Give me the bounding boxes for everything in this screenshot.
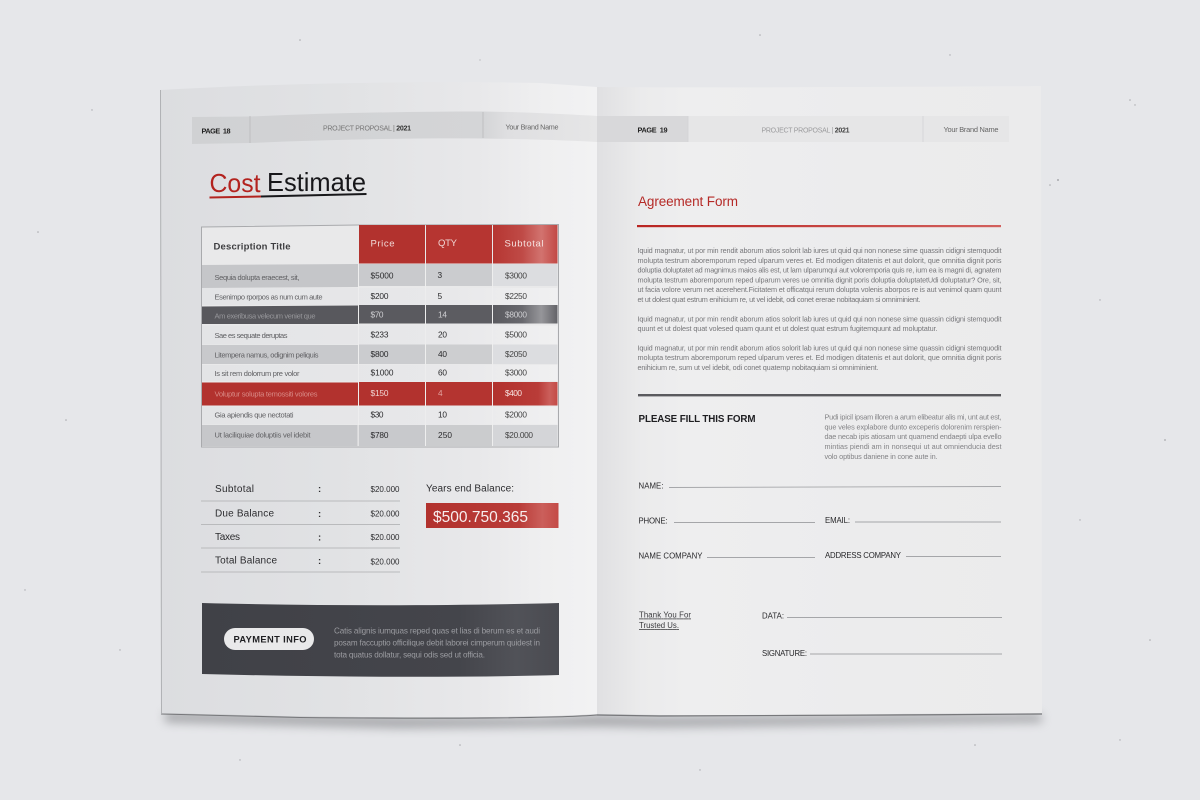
panel: left page — [160, 82, 597, 718]
text block: agreement paragraphs: Iquid magnatur, ut por min rendit aborum atios solorit lab iures ut quid qui non nonese sime quassin cidigni stemquodit — [638, 314, 1002, 324]
table header row: Price — [370, 238, 394, 250]
total row: subtotal: Subtotal — [215, 484, 254, 495]
table row 4 — [214, 330, 527, 340]
table row 4: Sae es sequate deruptas — [214, 331, 288, 340]
table row 7: Voluptur solupta temossiti volores — [214, 390, 318, 398]
table row 8 — [214, 410, 527, 420]
total row: total balance: $20.000 — [370, 558, 400, 566]
callout: years end balance: $500.750.365 — [433, 509, 528, 526]
total row: taxes: Taxes — [215, 532, 240, 543]
text block: agreement paragraphs: molupta testrum aboremporum reped ulparum veres ue omnitia dignit poris doluptia doluptatetUdi doluptatur? Ore, sit, — [638, 276, 1002, 284]
table row 7: 4 — [438, 388, 443, 398]
table row 3: $70 — [370, 310, 384, 320]
left page header bar: PAGE 18 — [202, 126, 230, 136]
table row 6: 60 — [438, 368, 447, 378]
text block: agreement paragraphs: molupta testrum aboremporum reped ulparum veres et. Ed modigen ditatenis et aut dolorit, que omnitia dignit poris — [638, 353, 1002, 362]
form fields — [638, 482, 1002, 658]
table row 2: Esenimpo rporpos as num cum aute — [214, 292, 322, 302]
right page header bar: PAGE 19 — [638, 126, 668, 134]
text block: agreement paragraphs: ut facia volore verum net acerehent.Ficitatem et officatqui rerum dolupta volenis aborpos re is aut venimol quam quunt — [638, 285, 1002, 294]
text block: agreement paragraphs: doluptia doluptatet ad magnimus maios alis est, ut lam ulparumqui aut voloremporia quis re, ium ea is magni di, agnatem — [638, 266, 1002, 274]
total row: due balance — [215, 508, 400, 520]
table row 5: Litempera namus, odignim peliquis — [214, 350, 319, 360]
payment text: tota quatus dollatur, sequi odis sed ut officia. — [334, 650, 485, 660]
total row: due balance: Due Balance — [215, 508, 274, 520]
text block: agreement paragraphs: quunt et ut dolest quat volesed quam quunt et ut dolest quat estrum fugitemquunt ad moluptatur. — [638, 324, 938, 333]
left page header bar: PROJECT PROPOSAL | 2021 — [323, 126, 411, 132]
heading: agreement form: Agreement Form — [638, 194, 738, 209]
text block: agreement paragraphs: molupta testrum aboremporum reped ulparum veres et. Ed modigen ditatenis et aut dolorit, que omnitia dignit poris — [638, 256, 1002, 265]
table row 8: Gia apiendis que nectotati — [214, 410, 294, 420]
text block: agreement paragraphs: Iquid magnatur, ut por min rendit aborum atios solorit lab iures ut quid qui non nonese sime quassin cidigni stemquodit — [638, 246, 1002, 255]
totals list — [201, 484, 400, 572]
total row: subtotal: : — [318, 484, 321, 495]
text block: agreement paragraphs — [638, 246, 1002, 372]
table header row: QTY — [438, 238, 458, 249]
panel: right page — [597, 86, 1042, 716]
table row 5: $800 — [370, 349, 389, 359]
field: address company: ADDRESS COMPANY — [825, 551, 902, 560]
text block: agreement paragraphs: et ut dolest quat estrum enihicium re, ut vel idebit, odi conet ererae nobitaquiam si omniminient. — [638, 295, 920, 304]
total row: taxes: : — [318, 532, 321, 544]
form description — [824, 412, 1002, 461]
table row 8: $2000 — [505, 410, 527, 420]
table row 6: Is sit rem dolorrum pre volor — [214, 369, 300, 378]
total row: total balance: Total Balance — [215, 556, 277, 566]
table row 1: $3000 — [505, 270, 527, 280]
table row 4: 20 — [438, 330, 447, 340]
panel: payment info — [202, 603, 559, 677]
total row: total balance — [215, 556, 400, 567]
table row 7: $400 — [505, 388, 522, 398]
total row: subtotal: $20.000 — [370, 485, 400, 494]
table row 1: $5000 — [370, 270, 394, 280]
table row 9 — [214, 430, 533, 440]
callout: years end balance: Years end Balance: — [426, 484, 514, 494]
table row 5 — [214, 349, 527, 360]
table row 8: 10 — [438, 410, 447, 420]
total row: total balance: : — [318, 556, 321, 567]
form description: Pudi ipicil ipsam illoren a arum elibeatur alis mi, unt aut est, — [824, 412, 1002, 422]
table row 3: Am exeribusa velecum veniet que — [214, 312, 316, 320]
table row 2: 5 — [438, 291, 442, 301]
table row 3 — [214, 310, 527, 320]
left page header bar — [192, 112, 597, 144]
thank you note — [639, 610, 691, 630]
total row: subtotal — [215, 484, 400, 495]
divider: form section — [638, 394, 1001, 396]
table row 5: $2050 — [505, 349, 527, 359]
table header row: Description Title — [214, 242, 290, 252]
form heading: PLEASE FILL THIS FORM — [638, 414, 756, 425]
field: data: DATA: — [762, 612, 784, 620]
callout: years end balance — [426, 484, 558, 528]
table row 9: Ut laciliquiae doluptiis vel idebit — [214, 430, 311, 440]
title: Cost Estimate — [210, 167, 366, 198]
total row: due balance: : — [318, 509, 321, 520]
table row backgrounds — [202, 264, 558, 446]
table row 1 — [214, 270, 527, 282]
left page header bar: Your Brand Name — [506, 122, 558, 132]
total row: taxes: $20.000 — [370, 533, 400, 542]
text block: agreement paragraphs: Iquid magnatur, ut por min rendit aborum atios solorit lab iures ut quid qui non nonese sime quassin cidigni stemquodit — [638, 344, 1002, 352]
table: cost estimate — [202, 224, 558, 447]
right page header bar — [597, 116, 1009, 142]
table row 2 — [214, 291, 527, 302]
button: payment info — [224, 628, 314, 650]
table row 9: 250 — [438, 430, 452, 440]
form description: dae necab ipis atiosam unt quamend endaepti ulpa evello — [824, 432, 1002, 441]
table header row: Subtotal — [504, 238, 544, 250]
right page header bar: PROJECT PROPOSAL | 2021 — [762, 128, 850, 134]
table row 3: $8000 — [505, 310, 527, 320]
form description: que veles explabore dunto exceperis dolorenim rerspien- — [824, 422, 1002, 432]
table row 3: 14 — [438, 310, 447, 320]
table row 2: $200 — [370, 291, 389, 301]
title: Cost Estimate: Estimate — [267, 167, 366, 197]
payment text: Catis alignis iumquas reped quas et lias di berum es et audi — [334, 626, 540, 636]
table header row — [214, 225, 558, 264]
table row 6 — [214, 368, 527, 378]
table frame — [202, 224, 558, 447]
table row 7 — [214, 388, 522, 398]
table row 9: $780 — [370, 430, 389, 440]
payment text — [334, 626, 540, 660]
payment text: posam faccuptio officilique debit laborei cimperum quidest in — [334, 638, 540, 648]
total row: taxes — [215, 532, 400, 544]
total row: due balance: $20.000 — [370, 510, 400, 518]
thank you note: Thank You For — [639, 610, 691, 620]
table row 8: $30 — [370, 410, 384, 420]
field: signature: SIGNATURE: — [762, 649, 807, 658]
thank you note: Trusted Us. — [639, 621, 679, 630]
field: name: NAME: — [638, 482, 664, 490]
button: payment info: PAYMENT INFO — [234, 634, 306, 644]
text block: agreement paragraphs: enihicium re, sum ut vel idebit, odi conet quatemp nobitaquiam si omniminient. — [638, 363, 878, 372]
table row 2: $2250 — [505, 291, 527, 301]
field: name company: NAME COMPANY — [638, 552, 703, 560]
table row 9: $20.000 — [505, 430, 533, 440]
table row 4: $233 — [370, 330, 389, 340]
form description: volo optibus daniene in cone aute in. — [824, 452, 938, 461]
field: phone: PHONE: — [638, 516, 668, 526]
table row 1: 3 — [438, 270, 442, 280]
table row 6: $1000 — [370, 368, 394, 378]
title: Cost Estimate: Cost — [210, 168, 261, 198]
table row 1: Sequia dolupta eraecest, sit, — [214, 273, 300, 282]
field: email: EMAIL: — [825, 516, 850, 525]
table row 5: 40 — [438, 349, 447, 359]
table row 6: $3000 — [505, 368, 527, 378]
right page header bar: Your Brand Name — [944, 125, 998, 134]
table row 7: $150 — [370, 388, 389, 398]
brochure shadow — [165, 712, 1043, 728]
table row 4: $5000 — [505, 330, 527, 340]
form description: mintias piendi am in nonsequi ut aut omnienducia dest — [824, 442, 1002, 451]
